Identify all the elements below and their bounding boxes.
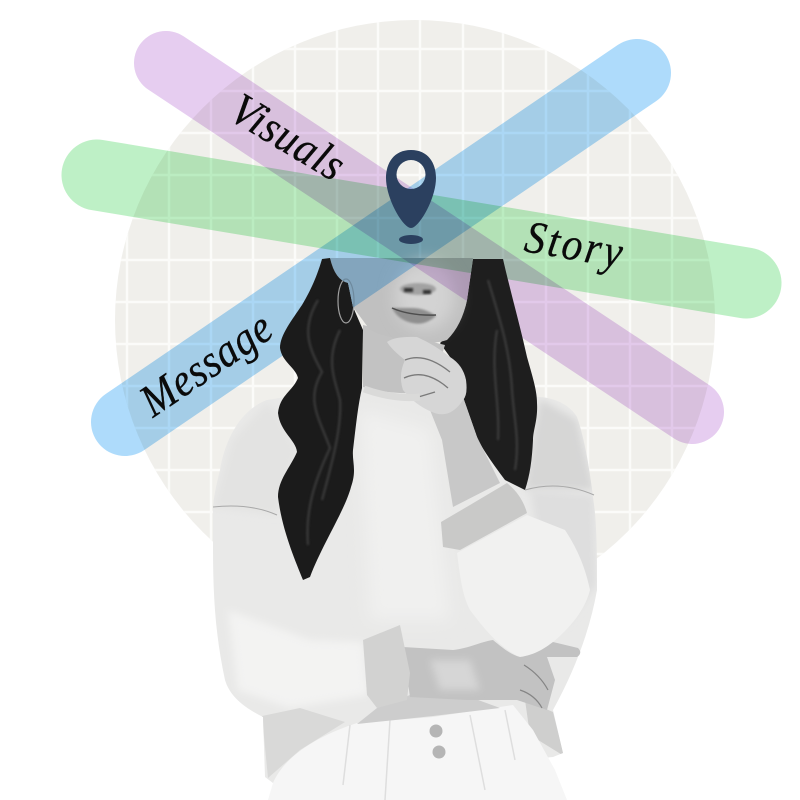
knuckle creases (520, 665, 548, 708)
hem shading (262, 708, 345, 778)
bar: visuals (purple) (166, 63, 692, 412)
jeans (268, 705, 567, 800)
earring (338, 279, 354, 323)
forearm highlight (430, 660, 480, 690)
icon: location pin (386, 150, 436, 244)
label: Story: Story (521, 212, 627, 279)
nostrils (404, 288, 431, 294)
forearm and hand (403, 640, 580, 710)
bar: message (blue) (125, 73, 637, 422)
face highlight (395, 262, 455, 330)
right lower sleeve shading (534, 496, 594, 588)
pin body (386, 150, 436, 228)
sweater body (200, 380, 610, 790)
neck (363, 325, 445, 393)
right hair (440, 259, 537, 490)
lips (392, 308, 436, 324)
bar: story (green) (97, 175, 746, 283)
pin shadow (399, 235, 423, 244)
tint: blue on cheek (330, 258, 426, 308)
rolled sleeve cuff (363, 625, 410, 708)
background circle with grid (115, 20, 715, 558)
finger creases (404, 358, 450, 398)
right shoulder shading (525, 399, 594, 490)
face color tints (330, 258, 473, 308)
torso highlight (360, 410, 450, 620)
nose shading (400, 283, 436, 295)
tint: green on cheek (380, 258, 473, 273)
sweater cuff on bent arm (441, 483, 527, 550)
bent arm sleeve (457, 515, 590, 657)
tint: purple on cheek (402, 258, 473, 301)
hair strands (307, 280, 517, 545)
shoulder seams (213, 486, 594, 515)
right hem shading (526, 703, 563, 754)
hand on chin (387, 337, 467, 414)
lip line (392, 308, 436, 315)
wrist (430, 397, 500, 507)
left sleeve highlight (234, 617, 364, 704)
ribbed hem (357, 695, 500, 724)
label: Visuals: Visuals (222, 84, 354, 191)
label: Message: Message (130, 302, 282, 427)
left hair (278, 258, 363, 580)
jeans pleats (343, 710, 515, 800)
jeans buttons (430, 724, 446, 758)
face (330, 258, 473, 342)
sweater collar (364, 389, 420, 398)
colored crossing bars (97, 63, 746, 422)
left shoulder shading (213, 402, 297, 515)
woman, black and white figure (200, 258, 610, 800)
